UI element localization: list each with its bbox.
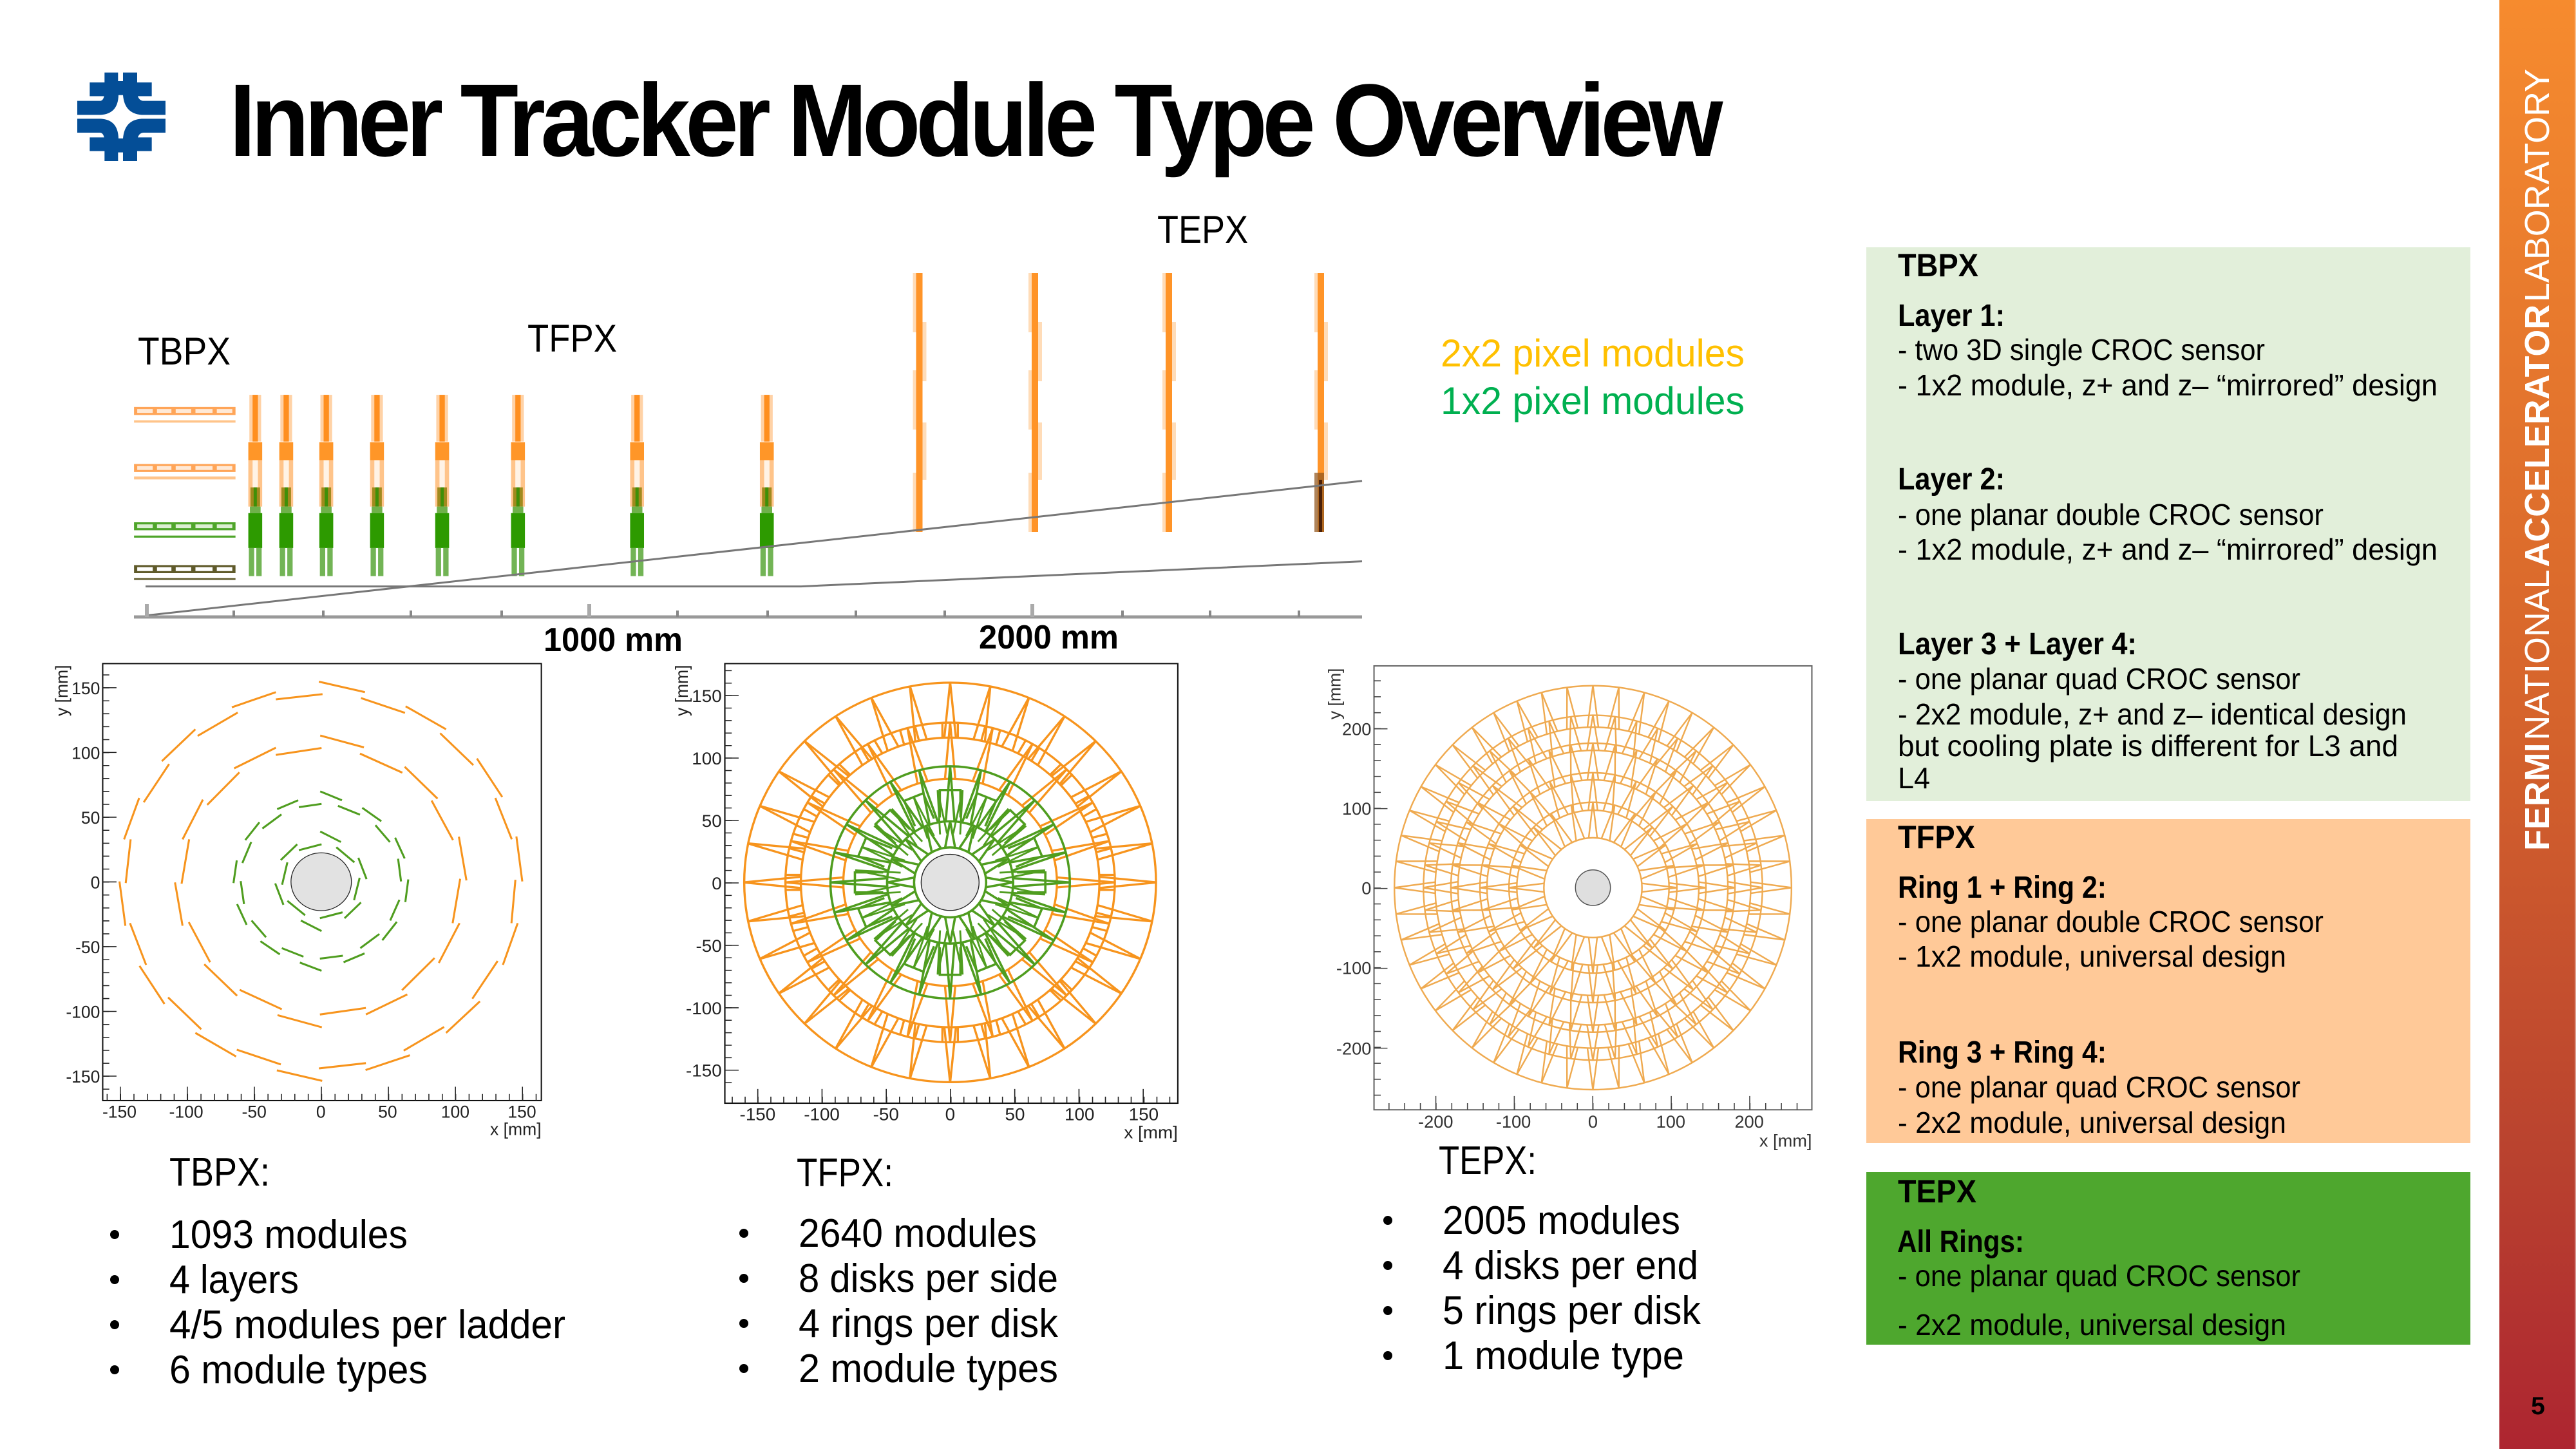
rings 3 and 4: Ring 3 + Ring 4: [1898,1036,2107,1070]
sidebar: Fermilab vertical band [2499,0,2576,1449]
axis tick labels: -200 [1336,1039,1371,1058]
axis tick labels: -200 [1418,1112,1453,1132]
rings 3 and 4: - one planar quad CROC sensor [1898,1070,2300,1104]
layer 3 and 4: L4 [1898,761,1930,795]
eta reference lines [146,481,1362,616]
text block: TEPX summary: 5 rings per disk [1443,1289,1701,1333]
panel heading: TEPX [1898,1173,1976,1209]
axis tick labels: 100 [71,743,100,762]
text block: TFPX summary: 8 disks per side [799,1256,1058,1301]
axis tick labels: 200 [1734,1112,1764,1132]
layer 3 and 4: - 2x2 module, z+ and z– identical design [1898,697,2407,731]
axis tick labels: 50 [81,808,100,828]
legend [1441,332,1745,422]
layer 3 and 4: - one planar quad CROC sensor [1898,662,2300,696]
axis tick labels: 150 [507,1103,536,1122]
rings 3 and 4: - 2x2 module, universal design [1898,1106,2286,1139]
axis tick labels: -150 [740,1104,775,1124]
axis tick labels: y [mm] [1325,668,1344,719]
axis tick labels: x [mm] [490,1120,542,1139]
layer 3 and 4 [1898,627,2407,795]
sidebar lab name: FERMI NATIONAL ACCELERATOR LABORATORY [2518,69,2557,851]
orange module outlines [1361,652,1824,1123]
axis tick labels: -100 [804,1104,840,1124]
axis tick labels: -100 [686,998,722,1018]
text block: TFPX summary [739,1151,1059,1391]
orange outer layers [120,681,522,1081]
TFPX disks [249,395,774,576]
axis tick labels: 150 [692,687,722,706]
text block: TFPX summary: 4 rings per disk [799,1302,1059,1346]
text block: TBPX summary: 1093 modules [169,1213,408,1257]
axis label: 1000 mm: 1000 mm [544,621,683,659]
beam pipe [291,853,352,911]
chart: TEPX x-y layout [1325,652,1824,1150]
all rings: - 2x2 module, universal design [1898,1308,2286,1341]
axis tick labels: 50 [1005,1104,1025,1124]
disk rings [1361,652,1824,1123]
label: TBPX: TBPX [138,330,231,373]
axis tick labels: -100 [169,1103,204,1122]
beam pipe [915,849,985,916]
axis tick labels: 100 [441,1103,469,1122]
layer 2: - one planar double CROC sensor [1898,498,2324,531]
axis tick labels: -150 [66,1067,100,1086]
chart: TFPX x-y layout [672,658,1182,1142]
text block: TBPX summary [110,1150,565,1392]
text block: TFPX summary: TFPX: [797,1151,893,1195]
all rings [1897,1225,2300,1341]
axis tick labels: -100 [1336,959,1371,978]
text block: TEPX summary: 2005 modules [1443,1198,1680,1243]
axis tick labels: 50 [702,811,722,831]
axis tick labels: 100 [1065,1104,1094,1124]
text block: TEPX summary: 4 disks per end [1443,1244,1698,1288]
rings 1 and 2: Ring 1 + Ring 2: [1898,871,2107,905]
axis tick labels: -100 [66,1002,100,1021]
text block: TEPX summary: 1 module type [1443,1334,1684,1378]
layer 2: Layer 2: [1898,462,2005,497]
rings 1 and 2: - 1x2 module, universal design [1898,940,2286,973]
label: TEPX: TEPX [1157,208,1248,251]
rings 1 and 2: - one planar double CROC sensor [1898,905,2324,938]
layer 3 and 4: Layer 3 + Layer 4: [1898,627,2137,661]
text block: TFPX summary: 2640 modules [799,1211,1037,1256]
axis tick labels: 0 [712,874,722,893]
label: TFPX: TFPX [527,317,617,360]
axis tick labels: 150 [1129,1104,1159,1124]
layer 1 [1898,299,2438,402]
text block: TBPX summary: TBPX: [169,1150,270,1195]
axis tick labels: -50 [75,938,100,957]
icon: Fermilab logo [77,73,166,161]
layer 1: Layer 1: [1898,299,2005,333]
text block: TBPX summary: 4 layers [169,1258,299,1302]
axis tick labels: x [mm] [1759,1132,1812,1150]
title: Inner Tracker Module Type Overview [229,62,1723,178]
axis tick labels: -150 [102,1103,137,1122]
legend: 1x2 pixel modules: 1x2 pixel modules [1441,379,1745,422]
axis tick labels: 50 [378,1103,397,1122]
axis tick labels: -100 [1496,1112,1531,1132]
axis tick labels [1325,668,1812,1150]
barrel layers [134,395,774,580]
axis tick labels: 100 [1656,1112,1685,1132]
panel heading: TFPX [1898,819,1975,855]
axis tick labels: 0 [1588,1112,1598,1132]
rings 1 and 2 [1898,871,2324,973]
chart: TBPX x-y layout [52,663,542,1139]
axis tick labels: 100 [1342,799,1371,819]
page number: 5 [2531,1392,2545,1420]
layer 1: - two 3D single CROC sensor [1898,333,2265,366]
all rings: All Rings: [1897,1225,2024,1259]
all rings: - one planar quad CROC sensor [1898,1259,2300,1293]
axis tick labels: -150 [686,1061,722,1081]
axis tick labels: 150 [71,679,100,698]
layer 3 and 4: but cooling plate is different for L3 and [1898,729,2398,762]
beam pipe [1575,870,1611,905]
text block: TBPX summary: 6 module types [169,1348,428,1392]
axis tick labels: 100 [692,749,722,768]
green rings 1 and 2 [820,757,1080,1008]
axis tick labels: -50 [873,1104,899,1124]
panel: TBPX details [1866,247,2470,801]
axis label: 2000 mm: 2000 mm [979,619,1119,656]
text block: TBPX summary: 4/5 modules per ladder [169,1303,565,1347]
panel heading: TBPX [1898,247,1978,283]
disk rings [718,658,1182,1108]
text block: TFPX summary: 2 module types [799,1347,1058,1391]
legend: 2x2 pixel modules: 2x2 pixel modules [1441,332,1745,375]
panel: TEPX details [1866,1172,2470,1345]
axis tick labels: y [mm] [52,665,71,716]
text block: TEPX summary: TEPX: [1439,1139,1537,1183]
TEPX disks [913,273,1328,532]
axis tick labels: 200 [1342,720,1371,739]
axis tick labels: y [mm] [672,665,692,716]
axis tick labels: 0 [316,1103,326,1122]
orange rings 3 and 4 [718,658,1182,1108]
detector cross-section diagram [134,208,1362,659]
axis tick labels: x [mm] [1124,1122,1178,1142]
z axis with ticks [134,604,1362,617]
rings 3 and 4 [1898,1036,2300,1139]
green inner layers [234,791,408,971]
text block: TEPX summary [1383,1139,1701,1378]
layer 2 [1898,462,2438,566]
axis tick labels: 0 [945,1104,955,1124]
panel: TFPX details [1866,819,2470,1143]
axis tick labels [52,665,542,1139]
axis tick labels: -50 [242,1103,267,1122]
axis tick labels [672,665,1178,1142]
axis tick labels: -50 [696,936,722,956]
layer 2: - 1x2 module, z+ and z– “mirrored” design [1898,533,2438,566]
layer 1: - 1x2 module, z+ and z– “mirrored” design [1898,368,2438,402]
axis tick labels: 0 [91,873,100,892]
axis tick labels: 0 [1361,879,1371,898]
